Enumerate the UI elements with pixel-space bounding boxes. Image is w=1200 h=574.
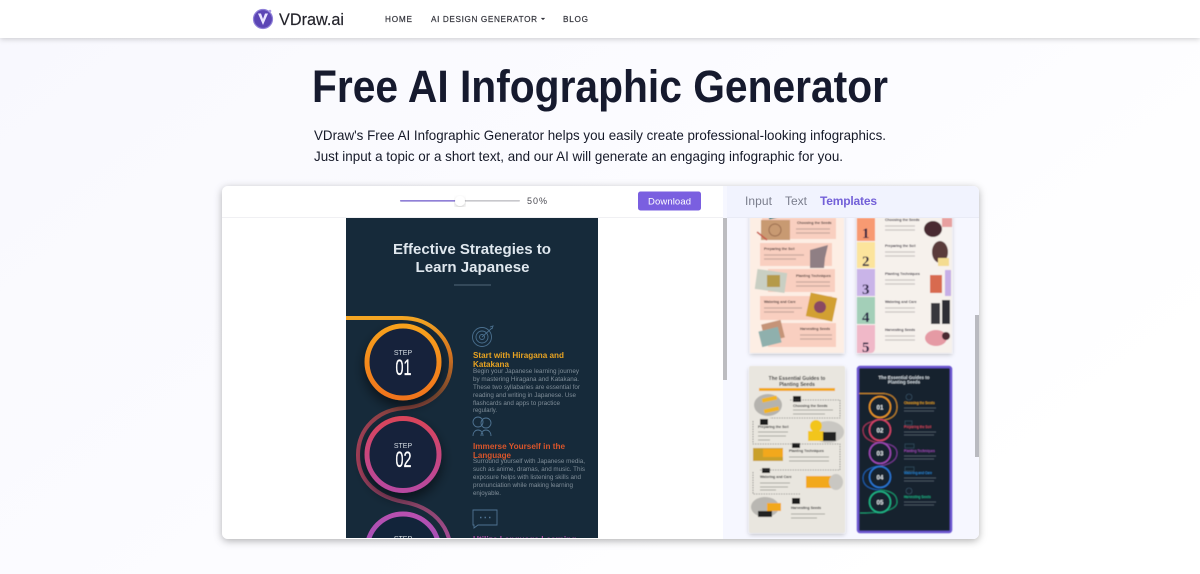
step 1 text: Begin your Japanese learning journey [473,368,580,375]
thumbnail: dark guide selected [858,367,951,532]
thumbnail: dark guide selected: Preparing the Soil [904,425,931,429]
download button [638,192,701,210]
step 2 text [473,441,586,497]
step 1 text: Katakana [473,359,509,369]
icon: chat bubble [473,510,497,528]
step 2 text: Immerse Yourself in the [473,441,565,451]
logo [254,10,344,29]
download button: Download [648,196,691,208]
thumbnail: dark guide selected: 03 [877,452,884,458]
thumbnail: dark guide selected: The Essential Guides to [878,375,930,380]
thumbnail: beige guide [749,366,845,533]
preview title [393,241,551,276]
preview title: Learn Japanese [416,259,530,276]
step 2 ring: STEP [394,443,412,450]
step 1 ring: STEP [394,350,412,357]
tabs: Input [745,194,773,208]
intro text [314,127,886,164]
snake line [346,318,451,552]
zoom slider: 50% [527,196,547,206]
panel: editor card [222,186,979,574]
thumbnail: pink steps: Choosing the Seeds [797,221,832,225]
thumbnail: beige guide: Planting Seeds [779,382,815,388]
icon: target [472,326,493,346]
thumbnail: dark guide selected: 01 [877,406,884,412]
step 2 ring: 02 [396,447,412,472]
step 2 text: such as anime, dramas, and music. This [473,466,586,473]
tabs: Text [785,194,808,208]
preview title: Effective Strategies to [393,241,551,258]
nav links [385,15,588,24]
step 2 text: Language [473,450,511,460]
infographic preview [346,218,598,538]
step 1 text: flashcards and apps to practice [473,400,560,407]
right scrollbar [975,315,979,457]
template thumbnails [749,205,952,533]
logo: VDraw.ai [279,11,344,29]
thumbnail: dark guide selected: Planting Techniques [904,449,935,453]
character figures [924,218,952,346]
step 1 text: Start with Hiragana and [473,350,564,360]
nav links: BLOG [563,15,588,24]
step 1 ring: 01 [396,355,412,380]
nav links: HOME [385,15,413,24]
thumbnail: colorful tabs: Watering and Care [885,300,917,304]
tabs: Templates [820,194,877,208]
step 1 text: These two syllabaries are essential for [473,384,581,391]
nav links: AI DESIGN GENERATOR [431,15,537,24]
thumbnail: colorful tabs: Planting Techniques [885,272,920,276]
thumbnail: colorful tabs: Harvesting Seeds [885,328,915,332]
thumbnail: dark guide selected: Harvesting Seeds [904,495,931,499]
step 1 text: regularly. [473,407,497,414]
step 1 text: reading and writing in Japanese. Use [473,392,576,399]
thumbnail: dark guide selected: Watering and Care [904,471,932,475]
thumbnail: colorful tabs: 2 [862,254,870,270]
thumbnail: dark guide selected: Planting Seeds [888,380,921,384]
thumbnail: colorful tabs: 4 [862,310,870,326]
zoom slider [400,196,547,206]
step 1 text [473,350,581,414]
step 2 ring [367,418,439,490]
icon: people [473,417,491,436]
thumbnail: colorful tabs: Preparing the Soil [885,244,916,248]
thumbnail: colorful tabs: 1 [862,226,870,242]
intro text: VDraw's Free AI Infographic Generator helps you easily create professional-looking infographics. [314,127,886,143]
step 3 heading: Utilize Language Learning [473,534,576,544]
step 3 ring: STEP [394,536,412,543]
left scrollbar [723,218,727,380]
navigation bar [0,0,1200,38]
step 2 text: pronunciation while making learning [473,482,573,489]
step 2 text: Surround yourself with Japanese media, [473,458,585,465]
thumbnail: beige guide: Choosing the Seeds [793,404,828,408]
thumbnail: beige guide: The Essential Guides to [769,376,825,382]
step 3 ring [366,512,440,538]
step 2 text: enjoyable. [473,490,501,497]
thumbnail: colorful tabs: 5 [862,340,870,356]
step 1 ring [367,326,439,398]
thumbnail: dark guide selected: 02 [877,428,884,434]
thumbnail: beige guide: Harvesting Seeds [791,506,821,510]
tabs [746,196,876,208]
thumbnail: dark guide selected: Choosing the Seeds [904,401,935,405]
thumbnail: colorful tabs [857,205,952,356]
thumbnail: beige guide: Preparing the Soil [758,425,789,429]
thumbnail: colorful tabs: 3 [862,282,870,298]
thumbnail: colorful tabs: Choosing the Seeds [885,218,920,222]
thumbnail: pink steps [750,205,844,353]
thumbnail: pink steps: Watering and Care [764,300,796,304]
thumbnail: dark guide selected: 05 [877,500,884,506]
intro text: Just input a topic or a short text, and our AI will generate an engaging infographic for you. [314,148,843,164]
thumbnail: pink steps: Preparing the Soil [764,247,795,251]
step 1 text: by mastering Hiragana and Katakana. [473,376,579,383]
thumbnail: pink steps: Harvesting Seeds [800,327,830,331]
thumbnail: dark guide selected: 04 [877,476,884,482]
thumbnail: beige guide: Planting Techniques [789,449,824,453]
step 2 text: exposure helps with listening skills and [473,474,581,481]
thumbnail: pink steps: Planting Techniques [796,274,831,278]
thumbnail: beige guide: Watering and Care [760,475,792,479]
title: Free AI Infographic Generator [312,61,888,112]
